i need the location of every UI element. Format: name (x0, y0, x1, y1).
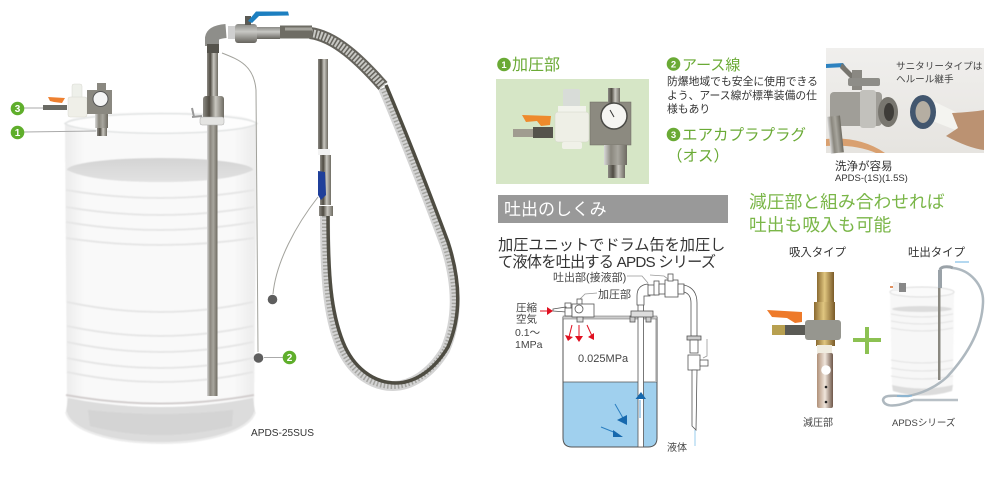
callout 2 (264, 351, 296, 364)
text: sanitary note (896, 62, 983, 86)
heading: air coupler plug (667, 126, 806, 165)
callout 3 (11, 102, 43, 115)
decompression unit photo (767, 272, 841, 408)
text: easy cleaning caption: APDS-(1S)(1.5S) (835, 173, 908, 184)
pressure unit schematic (553, 299, 594, 322)
main product illustration: drum with pump (43, 12, 458, 443)
mini APDS product photo (883, 262, 983, 405)
callout 2: 2 (287, 353, 293, 364)
text: sanitary note: ヘルール継手 (896, 74, 954, 86)
drum diagram (563, 316, 657, 447)
text: easy cleaning caption (835, 159, 908, 184)
pipe and fittings (630, 274, 708, 447)
label: suction type: 吸入タイプ (789, 246, 847, 259)
elbow (212, 31, 226, 46)
earth clip balls (268, 295, 277, 304)
label: decompression part: 減圧部 (803, 416, 833, 429)
text: earth wire description: 防爆地域でも安全に使用できる (667, 74, 818, 88)
heading: air coupler plug: 3 (671, 130, 676, 141)
liquid drip (694, 430, 696, 446)
diagram labels: 液体 (667, 442, 687, 454)
text: mechanism description: て液体を吐出する APDS シリーズ (498, 254, 716, 271)
heading: earth wire: アース線 (682, 57, 740, 74)
valve and pipe (826, 63, 898, 154)
transparent drum (65, 112, 257, 443)
orange drum rim (826, 139, 885, 153)
callout 1 (11, 126, 96, 139)
heading: combine with decompression unit (749, 192, 945, 235)
heading: air coupler plug: （オス） (667, 148, 729, 165)
text: mechanism description: 加圧ユニットでドラム缶を加圧し (498, 237, 725, 254)
heading: combine with decompression unit: 減圧部と組み合わせれば (749, 192, 945, 212)
section banner (498, 195, 728, 223)
callout 1: 1 (15, 128, 21, 139)
diagram labels: 0.1～ (515, 327, 541, 339)
text: earth wire description: よう、アース線が標準装備の仕 (667, 88, 817, 102)
label: discharge type: 吐出タイプ (908, 246, 966, 259)
panel: pressure unit photo (496, 79, 649, 184)
diagram labels: 圧縮 (516, 301, 537, 314)
plus sign (853, 327, 881, 354)
earth wires (222, 53, 318, 352)
diagram labels: 加圧部 (598, 288, 631, 301)
gauge block (590, 88, 631, 178)
red air arrows (540, 307, 594, 342)
diagram labels: 空気 (516, 312, 537, 326)
diagram labels (515, 271, 687, 454)
text: earth wire description: 様もあり (667, 102, 710, 116)
heading: air coupler plug: エアカプラプラグ (682, 126, 806, 144)
heading: combine with decompression unit: 吐出も吸入も可能 (749, 215, 891, 235)
diagram: discharge mechanism (515, 271, 708, 454)
icon: coupler with orange lever (513, 115, 553, 138)
text: earth wire description (667, 74, 818, 116)
main ball valve (228, 26, 235, 39)
flexible hose (280, 29, 458, 386)
panel: sanitary ferrule photo (826, 48, 984, 154)
regulator body (555, 89, 589, 149)
diagram labels: 吐出部(接液部) (553, 271, 626, 284)
leader lines (580, 275, 707, 358)
heading: pressure section: 1 (501, 60, 507, 71)
drum bung fitting (203, 96, 224, 124)
blue lever on wand (318, 171, 326, 200)
pump tube (207, 124, 218, 396)
diagram labels: 1MPa (515, 339, 543, 351)
blue liquid arrows (601, 392, 646, 437)
suction wand (318, 59, 328, 149)
section banner: 吐出のしくみ (504, 200, 607, 219)
pressure unit (43, 83, 112, 136)
callout 3: 3 (15, 104, 21, 115)
label: APDS series: APDSシリーズ (892, 417, 956, 429)
heading: earth wire: 2 (671, 60, 676, 70)
text: sanitary note: サニタリータイプは (896, 62, 983, 72)
ferrule and hand (910, 95, 984, 150)
text: easy cleaning caption: 洗浄が容易 (835, 159, 892, 173)
diagram labels: 0.025MPa (578, 353, 629, 365)
blue valve handle (248, 12, 289, 23)
heading: pressure section: 加圧部 (512, 56, 560, 74)
model label: APDS-25SUS (251, 428, 314, 439)
text: mechanism description (498, 237, 725, 271)
